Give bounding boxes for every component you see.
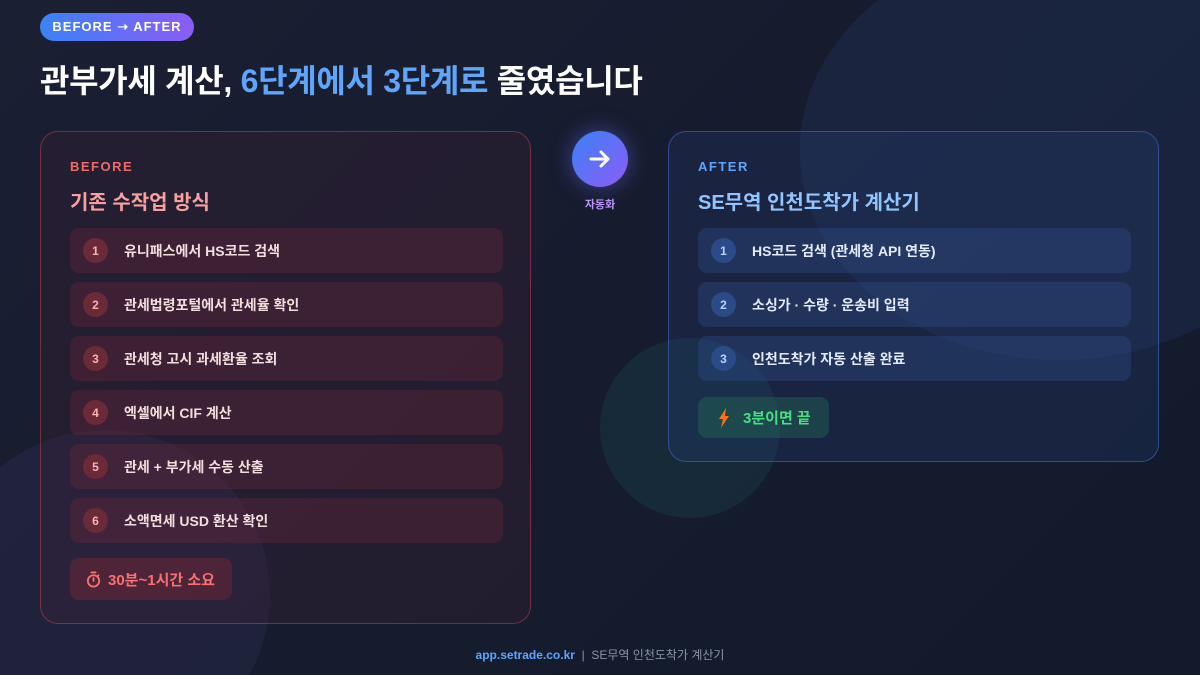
- step 3: 관세청 고시 과세환율 조회: [124, 350, 277, 366]
- label: after: AFTER: [698, 159, 749, 174]
- step 1: 유니패스에서 HS코드 검색: [124, 242, 280, 258]
- step 3: [698, 336, 1131, 381]
- step 1: [70, 228, 503, 273]
- title: 관부가세 계산, 6단계에서 3단계로 줄였습니다: [40, 63, 642, 99]
- step 1: 1: [720, 244, 727, 258]
- heading: calculator: SE무역 인천도착가 계산기: [698, 192, 920, 214]
- step 4: [70, 390, 503, 435]
- step 1: 1: [92, 244, 99, 258]
- step 2: 2: [92, 298, 99, 312]
- badge: time: [70, 558, 232, 600]
- step 1: HS코드 검색 (관세청 API 연동): [752, 242, 936, 258]
- step 2: 관세법령포털에서 관세율 확인: [124, 296, 299, 312]
- step 3: [70, 336, 503, 381]
- arrow: automation: 자동화: [585, 199, 615, 211]
- badge: 3 minutes: [698, 397, 829, 438]
- panel: after: [668, 131, 1159, 462]
- step 2: [70, 282, 503, 327]
- step 5: [70, 444, 503, 489]
- step 1: [698, 228, 1131, 273]
- step 3: 3: [92, 352, 99, 366]
- heading: manual method: 기존 수작업 방식: [70, 192, 210, 214]
- step 5: 관세 + 부가세 수동 산출: [124, 458, 264, 474]
- step 3: 3: [720, 352, 727, 366]
- badge: 3 minutes: 3분이면 끝: [743, 410, 811, 427]
- tag pill: [40, 13, 194, 41]
- badge: time: 30분~1시간 소요: [108, 572, 215, 588]
- label: before: BEFORE: [70, 159, 133, 174]
- tag pill: BEFORE ➝ AFTER: [52, 19, 182, 34]
- step 2: 2: [720, 298, 727, 312]
- step 6: 6: [92, 514, 99, 528]
- step 6: 소액면세 USD 환산 확인: [124, 512, 268, 528]
- step 4: 4: [92, 406, 99, 420]
- step 3: 인천도착가 자동 산출 완료: [752, 350, 905, 366]
- step 5: 5: [92, 460, 99, 474]
- step 4: 엑셀에서 CIF 계산: [124, 404, 232, 420]
- step 2: 소싱가 · 수량 · 운송비 입력: [752, 296, 910, 312]
- arrow: automation: [560, 119, 640, 211]
- panel: before: [40, 131, 531, 624]
- step 6: [70, 498, 503, 543]
- step 2: [698, 282, 1131, 327]
- footer: app.setrade.co.kr | SE무역 인천도착가 계산기: [476, 648, 724, 662]
